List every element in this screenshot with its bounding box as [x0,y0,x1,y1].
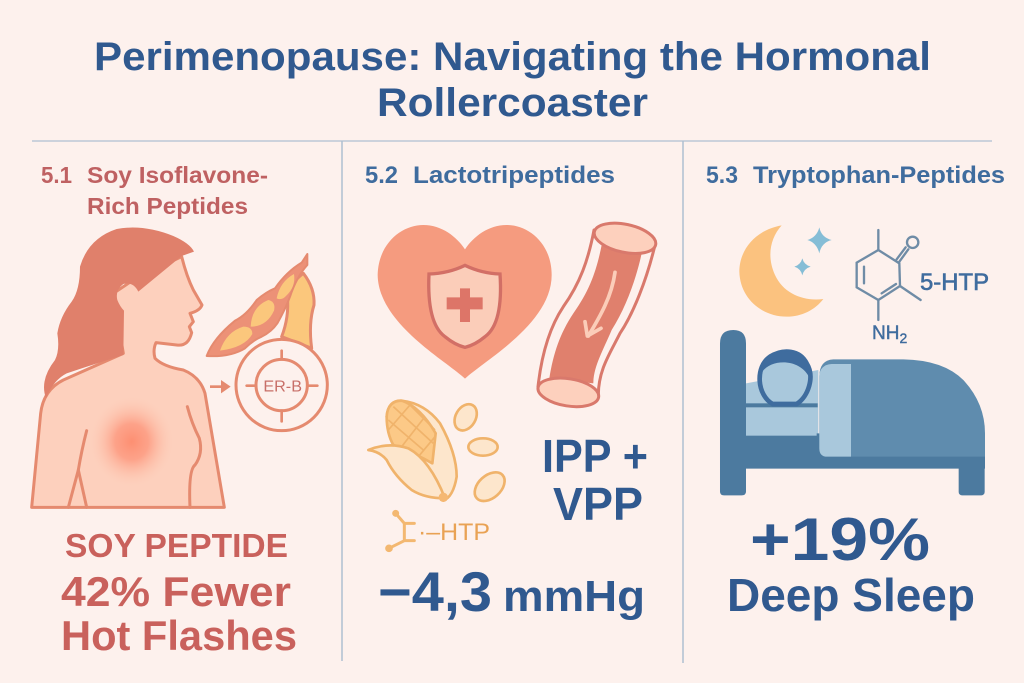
heading: 5.1: Rich Peptides [87,193,248,219]
heading: 5.1 [41,162,268,219]
title: Perimenopause: Navigating the Hormonal [94,35,931,79]
icon: heart with shield [378,225,552,379]
heading: 5.3: 5.3 [706,162,738,189]
heading: 5.1: Soy Isoflavone- [87,162,268,188]
icon: corn and peptides [368,400,510,507]
icon: 5-HTP molecule [857,230,989,346]
icon: 5-HTP molecule: 5-HTP [920,269,989,296]
illustration: woman with hot-flash glow [32,228,224,507]
heading: 5.2: Lactotripeptides [413,162,615,189]
icon: HTP molecule label [387,511,490,551]
icon: blood vessel [536,218,659,411]
callout: -4,3 mmHg [378,560,645,623]
icon: person sleeping in bed [720,330,985,495]
label: IPP + VPP: VPP [553,478,643,530]
callout: 42% fewer hot flashes [61,527,297,659]
panel: 5.3 tryptophan-peptides [706,162,1005,621]
callout: 42% fewer hot flashes: Hot Flashes [61,612,297,659]
icon: soybean pod [207,254,314,356]
callout: 42% fewer hot flashes: SOY PEPTIDE [65,527,288,564]
icon: ER-B receptor target [236,339,327,431]
callout: -4,3 mmHg: mmHg [503,572,645,621]
heading: 5.1: 5.1 [41,162,72,188]
panel: 5.2 lactotripeptides [365,162,659,623]
callout: +19% deep sleep: Deep Sleep [727,569,975,621]
label: IPP + VPP [542,430,648,530]
callout: +19% deep sleep [727,506,975,621]
callout: -4,3 mmHg: −4,3 [378,560,492,623]
icon: ER-B receptor target: ER-B [263,378,302,395]
title: Rollercoaster [377,81,648,125]
heading: 5.2: 5.2 [365,162,398,189]
arrow: to receptor [210,380,231,393]
heading: 5.3: Tryptophan-Peptides [753,162,1005,189]
icon: moon and stars [739,225,832,317]
label: IPP + VPP: IPP + [542,430,648,482]
icon: 5-HTP molecule: 2 [899,330,907,346]
panel: 5.1 soy isoflavone-rich peptides [32,162,327,659]
icon: 5-HTP molecule: NH [872,323,899,344]
callout: 42% fewer hot flashes: 42% Fewer [61,568,291,615]
callout: +19% deep sleep: +19% [750,506,930,573]
title [94,35,931,125]
icon: HTP molecule label: ·–HTP [418,519,490,546]
